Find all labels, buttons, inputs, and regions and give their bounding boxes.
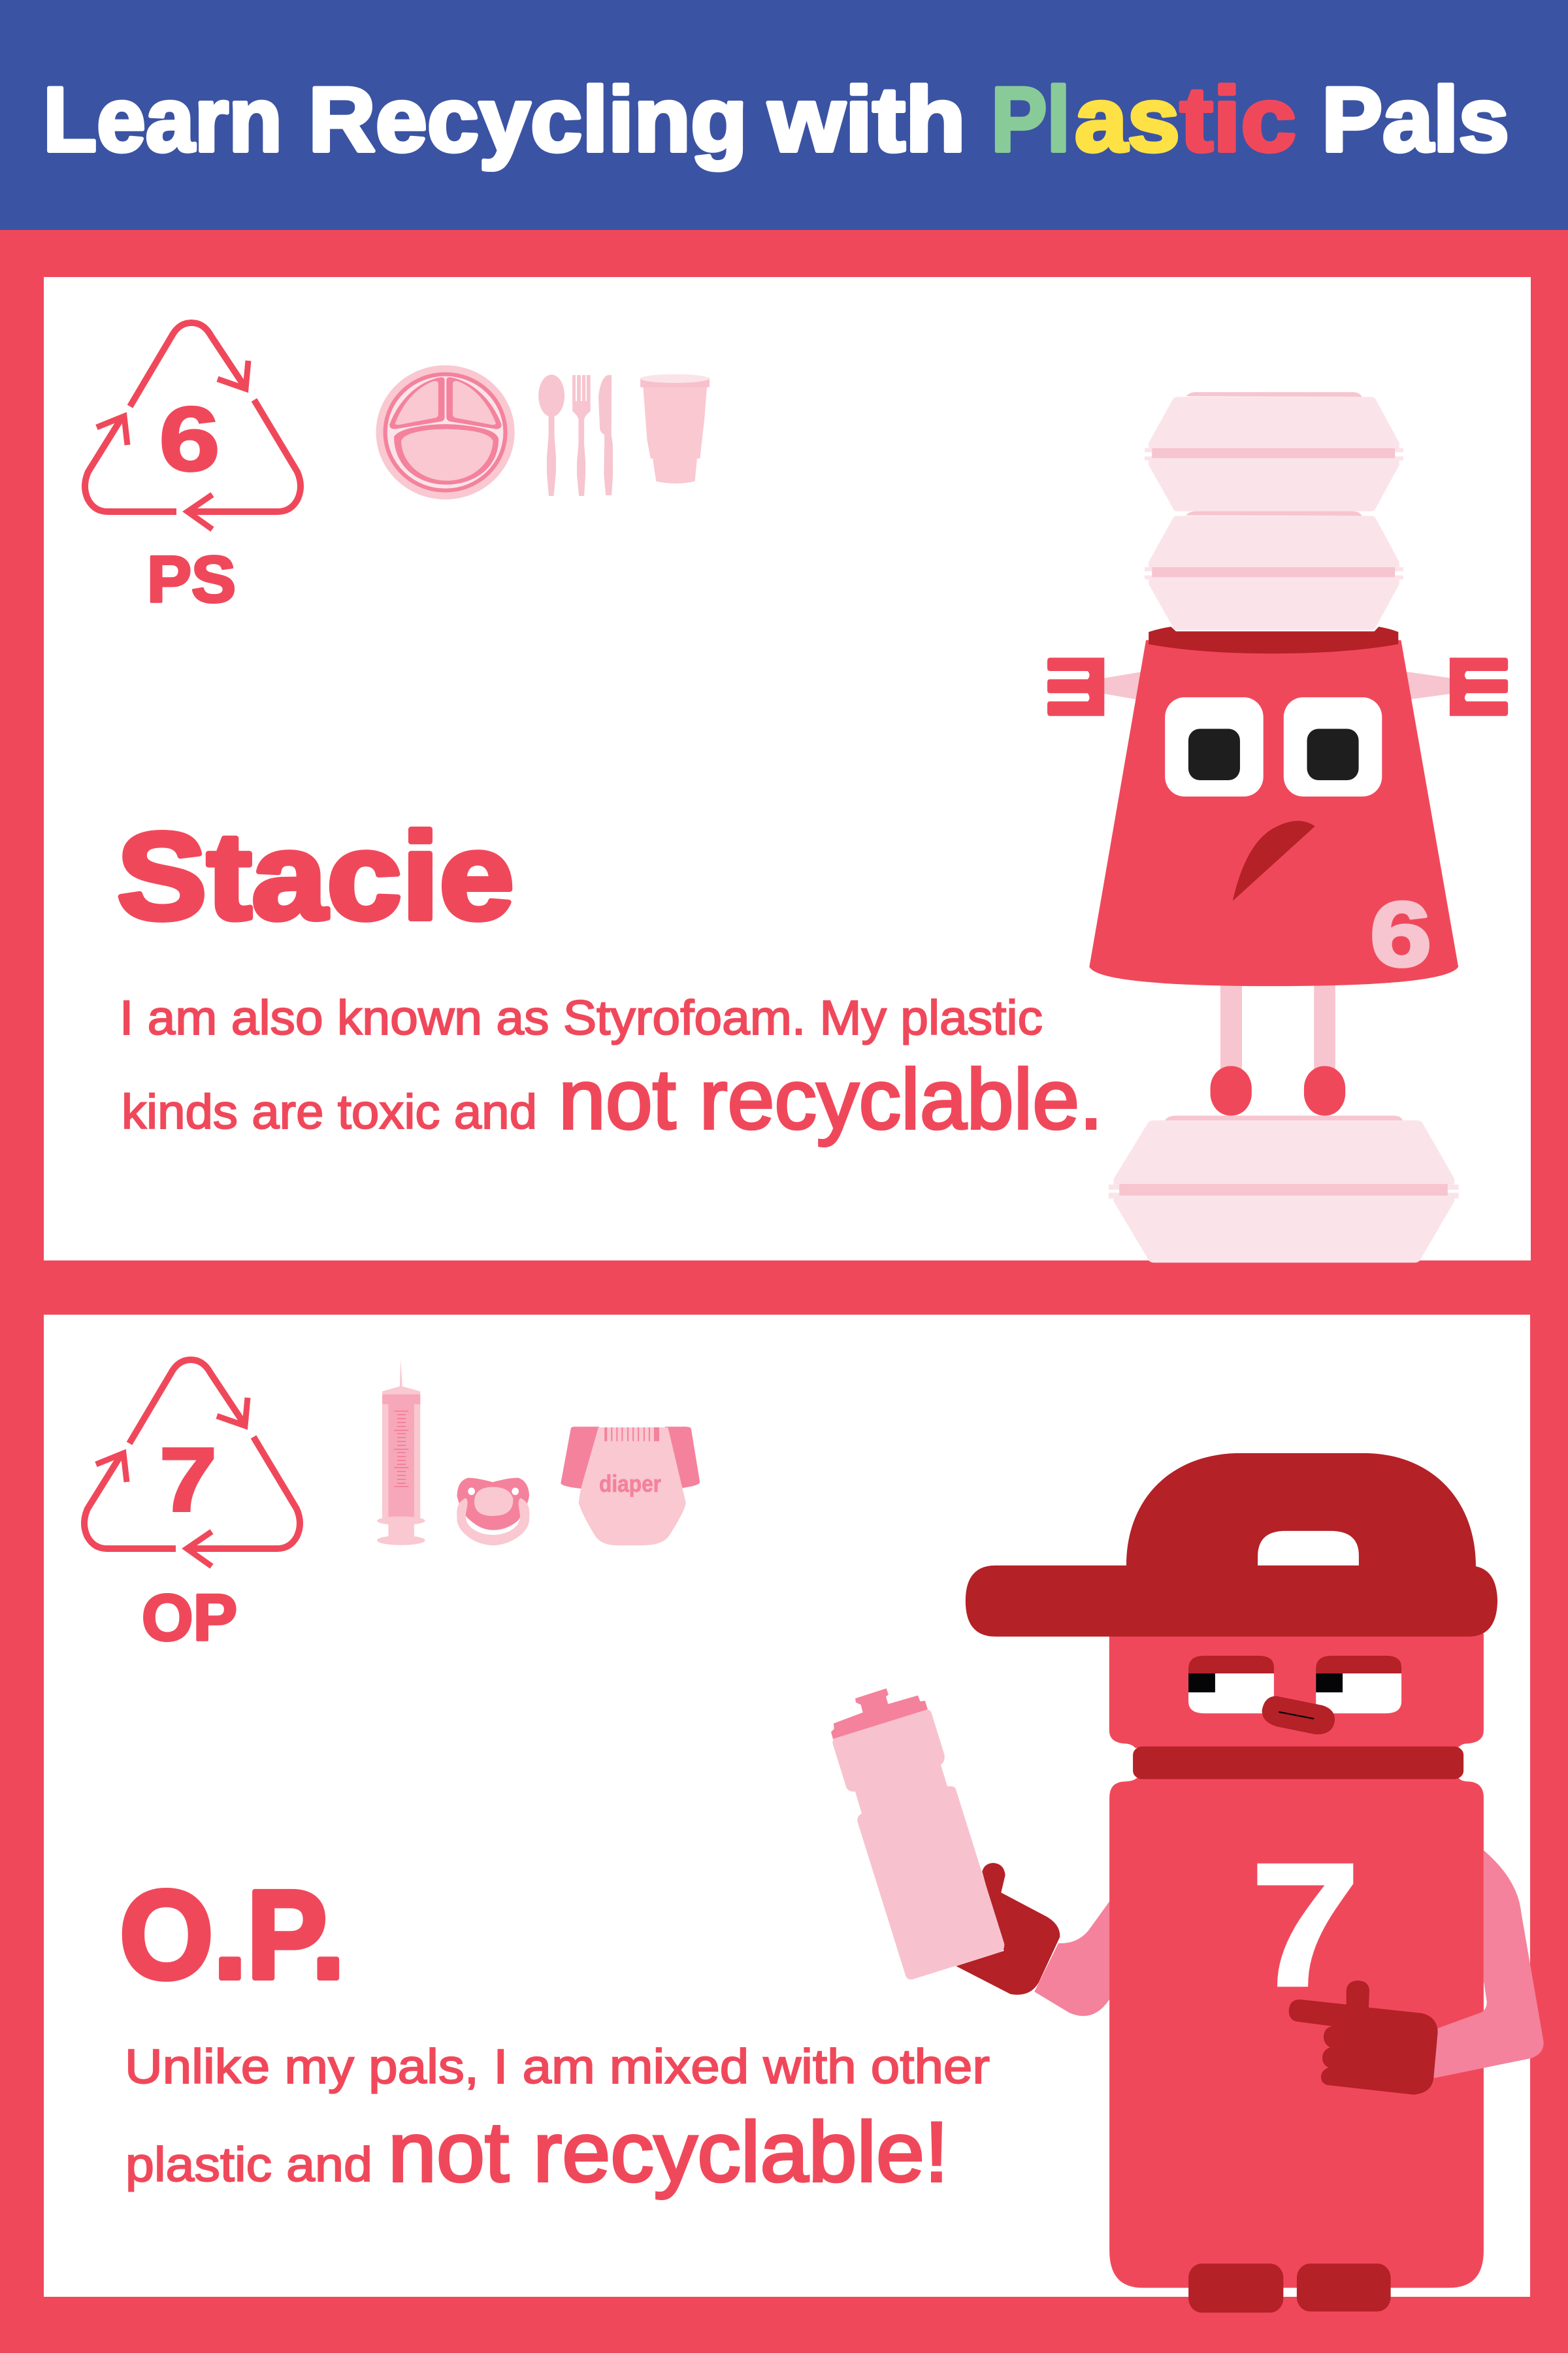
panel: Stacie: [44, 277, 1531, 1262]
feet: [1188, 2263, 1391, 2312]
cup rim: [1149, 627, 1398, 653]
panel: O.P.: [44, 1315, 1544, 2312]
backwards cap: [966, 1453, 1497, 1637]
cup body: [1089, 640, 1458, 986]
title: Recycling: [308, 68, 747, 171]
label: OP: OP: [142, 1581, 237, 1654]
arms: [1104, 672, 1451, 700]
icon: syringe: [377, 1360, 425, 1545]
character: O.P.: [831, 1453, 1544, 2312]
nose / mouth: [1262, 1696, 1335, 1734]
icon: recycling symbol 6: 6: [159, 387, 220, 490]
icon: recycling symbol 7: 7: [159, 1430, 217, 1530]
title: as: [1075, 68, 1180, 171]
text block: O.P. description: [125, 2039, 990, 2199]
left arm: [1034, 1900, 1113, 2016]
icon: divided plate: [376, 365, 515, 499]
text block: Stacie description: [120, 991, 1103, 1147]
clamshell container under feet: [1109, 1115, 1459, 1262]
header banner: [0, 0, 1568, 230]
head: [966, 1453, 1497, 1779]
icon: recycling symbol 7: [84, 1360, 300, 1566]
name: O.P.: O.P.: [120, 1864, 345, 2005]
character: Stacie the cup: [1047, 392, 1508, 1262]
icon: diaper: [561, 1426, 700, 1545]
legs and feet: [1211, 981, 1345, 1115]
text block: O.P. description: not recyclable!: [388, 2104, 949, 2199]
icon: plastic cup: [640, 374, 710, 484]
text block: O.P. description: plastic and: [125, 2137, 372, 2192]
right arm: [1433, 1851, 1544, 2079]
title: tic: [1180, 68, 1296, 171]
label: PS: PS: [147, 543, 236, 616]
jersey number 7: 7: [1250, 1827, 1361, 2024]
name: Stacie: Stacie: [117, 808, 514, 946]
torso: [1109, 1778, 1484, 2288]
eyes: [1188, 1656, 1401, 1713]
pointing hand: [1289, 1981, 1438, 2095]
eyes: [1165, 697, 1382, 797]
number on cup: 6: [1370, 883, 1431, 985]
text block: O.P. description: Unlike my pals, I am mixed with other: [125, 2039, 990, 2094]
water bottle: [831, 1688, 1004, 1979]
title: Learn: [43, 68, 282, 171]
text block: Stacie description: not recyclable.: [559, 1051, 1103, 1147]
title: Pl: [991, 68, 1070, 171]
mouth: [1233, 821, 1315, 901]
icon: diaper: diaper: [599, 1470, 661, 1497]
neck band: [1133, 1747, 1463, 1779]
text block: Stacie description: I am also known as Styrofoam. My plastic: [120, 991, 1043, 1045]
title: with: [768, 68, 966, 171]
icon: spoon, fork and knife: [538, 374, 613, 496]
hands: [1047, 657, 1508, 716]
title: [43, 68, 1509, 171]
title: Pals: [1322, 68, 1509, 171]
icon: recycling symbol 6: [85, 323, 301, 529]
left hand holding bottle: [956, 1863, 1060, 1995]
clamshell containers on head: [1145, 392, 1403, 630]
icon: pacifier: [457, 1478, 529, 1545]
text block: Stacie description: kinds are toxic and: [122, 1085, 537, 1139]
